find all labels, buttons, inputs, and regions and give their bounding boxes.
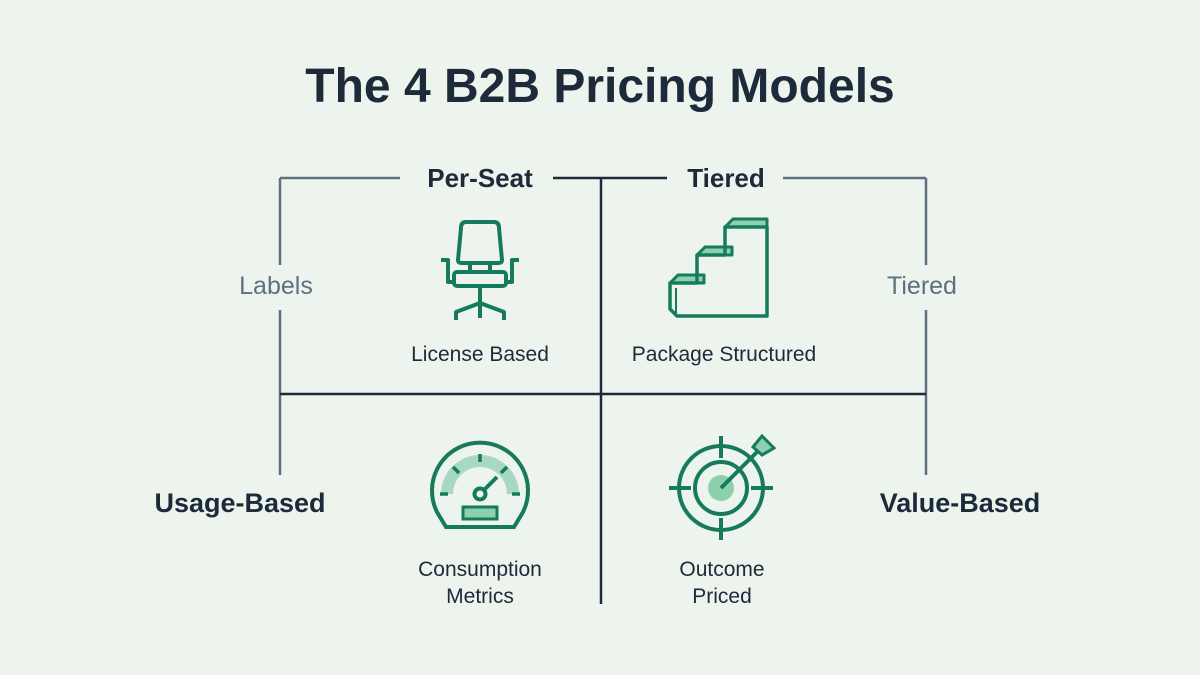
- icon: gauge: [432, 443, 528, 527]
- heading: Tiered: Tiered: [687, 163, 765, 193]
- heading: Per-Seat: Per-Seat: [427, 163, 533, 193]
- heading: Value-Based: Value-Based: [880, 488, 1040, 518]
- caption: Outcome Priced: Priced: [692, 585, 752, 608]
- frame lines: [280, 178, 926, 604]
- icon: chair: [441, 222, 519, 320]
- caption: Package Structured: Package Structured: [632, 343, 816, 366]
- caption: Consumption Metrics: Metrics: [446, 585, 514, 608]
- heading: Usage-Based: Usage-Based: [154, 488, 326, 518]
- side label: Labels: Labels: [239, 272, 313, 300]
- caption: Outcome Priced: Outcome: [679, 558, 765, 581]
- title: The 4 B2B Pricing Models: [305, 60, 895, 113]
- caption: License Based: License Based: [411, 343, 549, 366]
- icon: stairs: [670, 219, 767, 316]
- caption: Consumption Metrics: Consumption: [418, 558, 542, 581]
- icon: target: [669, 436, 774, 540]
- side label: Tiered: Tiered: [887, 272, 957, 300]
